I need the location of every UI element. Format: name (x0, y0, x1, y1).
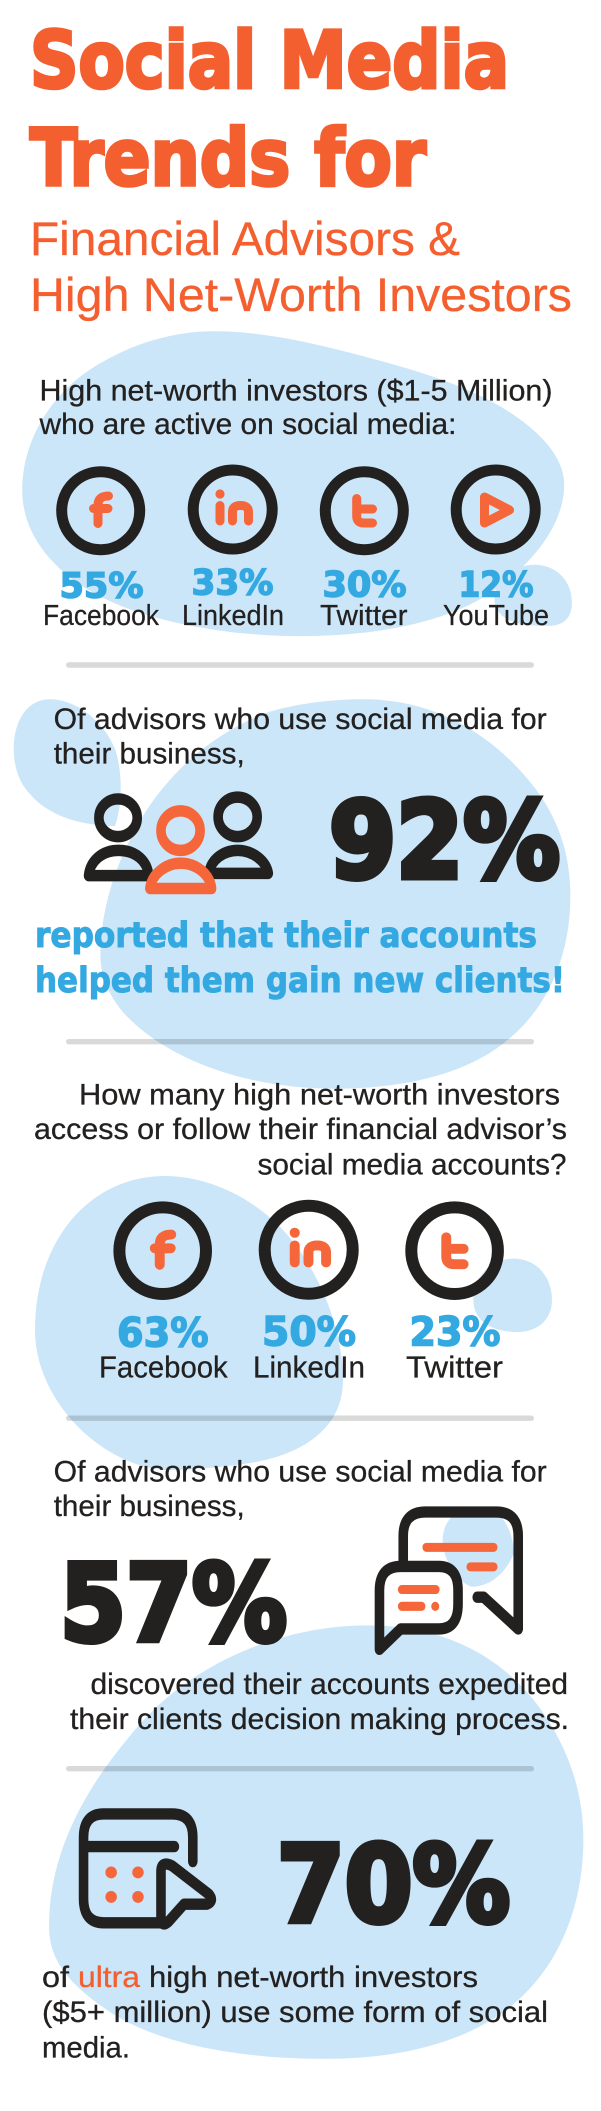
intro text: High net-worth investors ($1-5 Million) (40, 374, 552, 407)
intro text: How many high net-worth investors (79, 1079, 560, 1112)
intro text (34, 1079, 567, 1182)
stat: facebook 55%: 55% (60, 566, 144, 606)
panel: ultra high net-worth investors (42, 1814, 548, 2065)
stat: youtube 12%: 12% (458, 566, 534, 606)
panel: active on social media (39, 374, 553, 632)
stat: twitter 23%: 23% (410, 1310, 500, 1356)
icon: people group (89, 797, 268, 888)
stat: facebook 63%: 63% (117, 1310, 208, 1356)
stat: twitter 23% (406, 1310, 503, 1384)
body text: their clients decision making process. (70, 1703, 569, 1736)
icon: linkedin (193, 470, 272, 549)
intro text: their business, (54, 738, 245, 771)
intro text: Of advisors who use social media for (54, 1456, 547, 1489)
stat: linkedin 50%: 50% (262, 1310, 356, 1356)
stat: facebook 63% (99, 1310, 228, 1384)
callout text: reported that their accounts (35, 916, 537, 956)
stat: linkedin 50%: LinkedIn (253, 1349, 365, 1384)
intro text: Of advisors who use social media for (54, 703, 547, 736)
stat: linkedin 33% (182, 564, 284, 632)
stat: linkedin 33%: 33% (192, 564, 274, 604)
icon: twitter (411, 1207, 498, 1294)
stat: 92%: 92% (329, 780, 560, 902)
stat: twitter 30% (320, 566, 408, 632)
stat: twitter 30%: 30% (322, 566, 406, 606)
stat: 70%: 70% (277, 1824, 510, 1946)
body text: media. (42, 2032, 130, 2065)
intro text (39, 374, 553, 441)
icon: facebook (119, 1207, 206, 1294)
body text: ultra (78, 1961, 140, 1994)
icon: linkedin (265, 1206, 353, 1294)
icon: calendar with cursor (84, 1814, 211, 1924)
panel: faster client decisions (54, 1456, 569, 1736)
body text: ($5+ million) use some form of social (42, 1996, 548, 2029)
subtitle (30, 212, 572, 321)
icon: facebook (62, 472, 140, 550)
title: Social Media (30, 16, 509, 106)
intro text (54, 1456, 547, 1523)
title (30, 16, 509, 204)
intro text: access or follow their financial advisor’s (34, 1113, 567, 1146)
intro text: social media accounts? (258, 1148, 566, 1182)
stat: twitter 30%: Twitter (320, 600, 408, 632)
stat: 57%: 57% (60, 1542, 287, 1666)
stat: linkedin 50% (253, 1310, 365, 1384)
intro text (54, 703, 547, 771)
stat: facebook 63%: Facebook (99, 1349, 228, 1384)
stat: youtube 12% (443, 566, 549, 632)
body text: of (42, 1961, 70, 1994)
icon: twitter (325, 472, 403, 550)
panel: investors following advisors (34, 1079, 567, 1384)
icon: chat bubbles (379, 1512, 518, 1649)
subtitle: High Net-Worth Investors (30, 268, 572, 321)
intro text: who are active on social media: (39, 408, 457, 441)
body text: discovered their accounts expedited (90, 1668, 568, 1701)
callout text (35, 916, 565, 1001)
stat: facebook 55%: Facebook (43, 600, 159, 632)
body text (70, 1668, 569, 1736)
body text: high net-worth investors (149, 1961, 478, 1994)
icon: youtube (456, 470, 535, 549)
background blobs (14, 331, 583, 2059)
subtitle: Financial Advisors & (30, 212, 460, 265)
title: Trends for (30, 114, 426, 204)
intro text: their business, (54, 1490, 245, 1523)
stat: linkedin 33%: LinkedIn (182, 600, 284, 632)
panel: advisors gained new clients (35, 703, 565, 1001)
stat: twitter 23%: Twitter (406, 1349, 503, 1384)
stat: youtube 12%: YouTube (443, 600, 549, 632)
stat: facebook 55% (43, 566, 159, 632)
body text (42, 1961, 548, 2065)
